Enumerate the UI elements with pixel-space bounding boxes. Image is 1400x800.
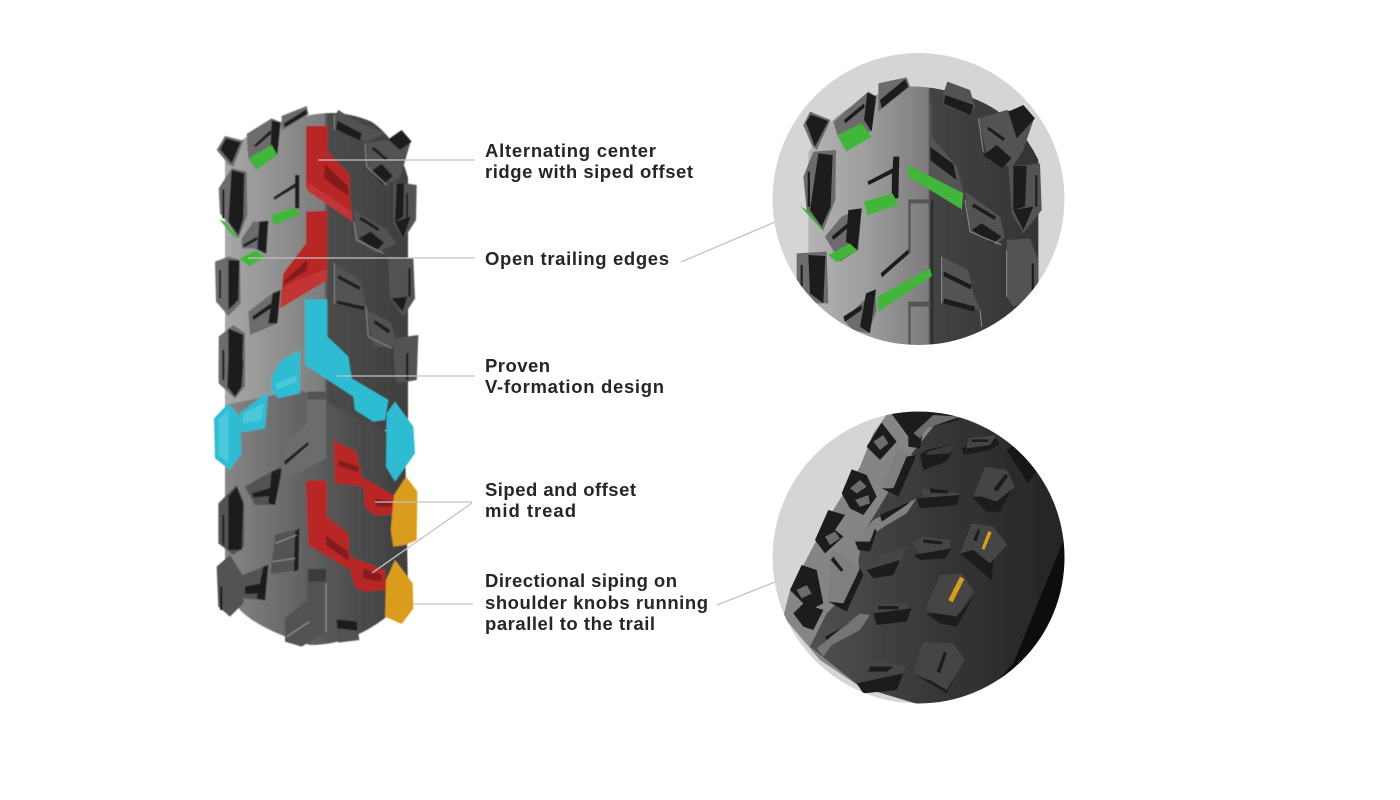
label: siped and offset mid tread: mid tread <box>485 500 576 521</box>
knobs <box>790 412 1015 693</box>
green edges in detail <box>801 123 963 312</box>
label: directional siping: Directional siping on <box>485 570 677 591</box>
leader lines <box>248 160 775 605</box>
label: siped and offset mid tread <box>485 479 636 521</box>
label: open trailing edges: Open trailing edges <box>485 248 669 269</box>
upper half knobs <box>215 106 418 380</box>
label: alternating center ridge: Alternating center <box>485 140 656 161</box>
red offset mid tread upper <box>333 441 393 515</box>
label: siped and offset mid tread: Siped and offset <box>485 479 636 500</box>
blue V-formation <box>214 299 415 482</box>
right knobs <box>943 82 975 115</box>
tire body <box>225 113 408 645</box>
right side knobs <box>334 110 385 142</box>
label: V-formation design <box>485 355 664 397</box>
red center ridge top <box>306 126 353 222</box>
label: V-formation design: V-formation design <box>485 376 664 397</box>
label: V-formation design: Proven <box>485 355 550 376</box>
center ridge outlines <box>908 100 911 165</box>
orange shoulder knob lower <box>385 560 413 624</box>
detail circle: directional siping on shoulder knobs <box>772 410 1067 707</box>
label: directional siping <box>485 570 708 634</box>
detail circle: open trailing edges <box>772 53 1064 347</box>
label: alternating center ridge: ridge with siped offset <box>485 161 693 182</box>
red offset mid tread lower <box>306 481 387 592</box>
orange shoulder knob upper <box>391 477 417 547</box>
lower half knobs <box>214 299 417 647</box>
main tire illustration <box>214 106 418 647</box>
red center ridge second <box>280 211 327 308</box>
green open trailing edges <box>219 145 299 267</box>
label: directional siping: shoulder knobs running <box>485 592 708 613</box>
label: directional siping: parallel to the trail <box>485 613 655 634</box>
label: alternating center ridge <box>485 140 693 182</box>
